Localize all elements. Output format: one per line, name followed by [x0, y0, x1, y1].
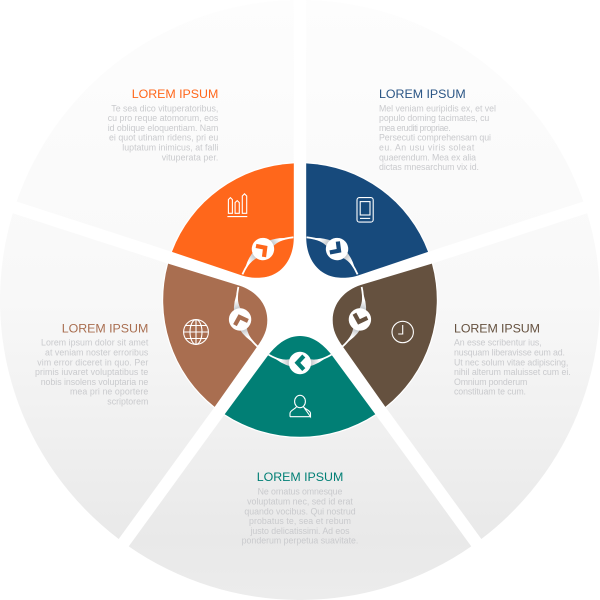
body: left: primis iuvaret voluptatibus te	[35, 367, 148, 377]
segment: orange	[172, 163, 294, 278]
body: right: An esse scribentur ius,	[454, 338, 542, 348]
ring node: blue	[305, 221, 369, 277]
ring node: teal	[268, 352, 332, 374]
outer sector: top right	[306, 0, 583, 291]
text block: bottom	[242, 470, 358, 546]
outer sector: right	[310, 213, 600, 539]
segment: teal	[225, 336, 375, 437]
body: bottom: quando vocibus. Qui nostrud	[244, 506, 356, 516]
ring node: orange	[231, 221, 295, 277]
icon: bar chart	[227, 194, 247, 217]
body: top left: vituperata per.	[162, 152, 218, 162]
body: top right: quaerendum. Mea ex alia	[379, 152, 476, 162]
body: bottom: justo delicatissimi. Ad eos	[250, 526, 350, 536]
body: top right	[379, 103, 496, 172]
outer sector: bottom	[129, 311, 471, 600]
body: top right: Mel veniam euripidis ex, et vel	[379, 103, 496, 113]
body: top right: eu. An usu viris soleat	[379, 142, 475, 152]
body: bottom	[242, 487, 358, 546]
text block: top left	[108, 87, 219, 162]
body: right: nusquam liberavisse eum ad.	[454, 348, 565, 358]
body: left: scriptorem	[107, 396, 148, 406]
body: bottom: probatus te, sea et rebum	[249, 516, 351, 526]
body: top left: ei quot utinam ridens, pri eu	[109, 133, 218, 143]
text block: right	[454, 321, 571, 397]
body: left: at veniam noster erroribus	[45, 348, 149, 358]
body: top left: id oblique eloquentiam. Nam	[108, 123, 218, 133]
segment: blue	[306, 163, 428, 278]
segment: light brown	[163, 264, 267, 407]
body: right: Omnium ponderum	[454, 377, 527, 387]
heading: right: LOREM IPSUM	[454, 321, 540, 335]
heading: left: LOREM IPSUM	[62, 321, 148, 335]
body: top right: Persecuti comprehensam qui	[379, 133, 491, 143]
segment: dark brown	[333, 264, 437, 407]
heading: top right: LOREM IPSUM	[379, 87, 466, 101]
body: top right: populo doming tacimates, cu	[379, 113, 489, 123]
body: left: mea pri ne oportere	[70, 387, 148, 397]
body: left: Lorem ipsum dolor sit amet	[41, 338, 149, 348]
body: bottom: ponderum perpetua suavitate.	[242, 536, 358, 546]
body: bottom: voluptatum nec, sed id erat	[247, 496, 353, 506]
body: left: nobis insolens voluptaria ne	[41, 377, 148, 387]
icon: phone	[357, 198, 373, 222]
icon: globe	[184, 320, 208, 344]
icon: clock	[392, 321, 413, 343]
text block: left	[35, 321, 149, 406]
body: top left: cu pro reque atomorum, eos	[108, 113, 219, 123]
heading: top left: LOREM IPSUM	[132, 87, 218, 101]
heading: bottom: LOREM IPSUM	[257, 470, 343, 484]
body: bottom: Ne ornatus omnesque	[258, 487, 342, 497]
ring node: dark brown	[340, 286, 380, 353]
body: top right: dictas mnesarchum vix id.	[379, 162, 479, 172]
body: left: vim error diceret in quo. Per	[37, 357, 148, 367]
body: left	[35, 338, 149, 406]
outer sector: top left	[17, 0, 294, 291]
body: right: Ut nec solum vitae adipiscing,	[454, 357, 568, 367]
outer sector: left	[0, 213, 290, 539]
body: right: constituam te cum.	[454, 387, 526, 397]
text block: top right	[379, 87, 496, 172]
ring node: light brown	[220, 286, 260, 353]
body: top left: luptatum inimicus, at falli	[122, 142, 218, 152]
body: top right: mea eruditi propriae.	[379, 123, 451, 133]
body: right	[454, 338, 571, 397]
body: top left	[108, 103, 219, 162]
icon: person	[290, 395, 310, 417]
body: right: nihil alterum maluisset cum ei.	[454, 367, 571, 377]
body: top left: Te sea dico vituperatoribus,	[111, 103, 218, 113]
